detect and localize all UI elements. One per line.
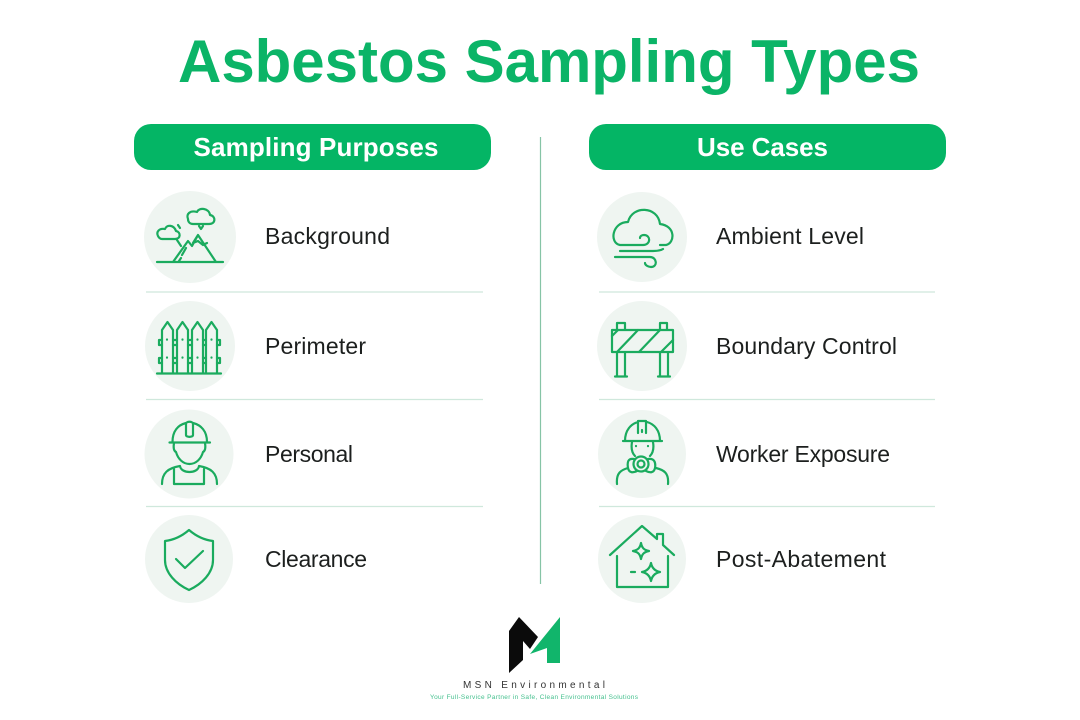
heading: use cases — [589, 124, 946, 170]
label: personal: Personal — [265, 441, 353, 467]
center divider — [540, 137, 542, 584]
icon: road barrier — [597, 301, 687, 391]
panel: sampling purposes — [134, 124, 491, 603]
icon: clean house — [598, 515, 686, 603]
label: perimeter: Perimeter — [265, 333, 366, 359]
label: ambient level: Ambient Level — [716, 223, 864, 249]
label: worker exposure: Worker Exposure — [716, 441, 890, 467]
heading: sampling purposes — [134, 124, 491, 170]
heading: sampling purposes: Sampling Purposes — [194, 132, 438, 162]
title: Asbestos Sampling Types — [178, 28, 920, 95]
icon: construction worker — [144, 410, 234, 498]
panel: use cases — [589, 124, 946, 603]
company name: MSN Environmental — [463, 680, 605, 691]
label: background: Background — [265, 223, 390, 249]
icon: cloud and wind — [597, 192, 687, 282]
label: boundary control: Boundary Control — [716, 333, 897, 359]
tagline: Your Full-Service Partner in Safe, Clean Environmental Solutions — [430, 694, 639, 701]
icon: worker with respirator — [598, 410, 686, 498]
logo mark — [509, 617, 560, 673]
label: post-abatement: Post-Abatement — [716, 546, 887, 572]
logo: MSN Environmental — [430, 617, 639, 701]
icon: shield check — [145, 515, 233, 603]
icon: fence — [145, 301, 235, 391]
heading: use cases: Use Cases — [697, 132, 828, 162]
label: clearance: Clearance — [265, 546, 367, 572]
icon: mountains and clouds — [144, 191, 236, 283]
